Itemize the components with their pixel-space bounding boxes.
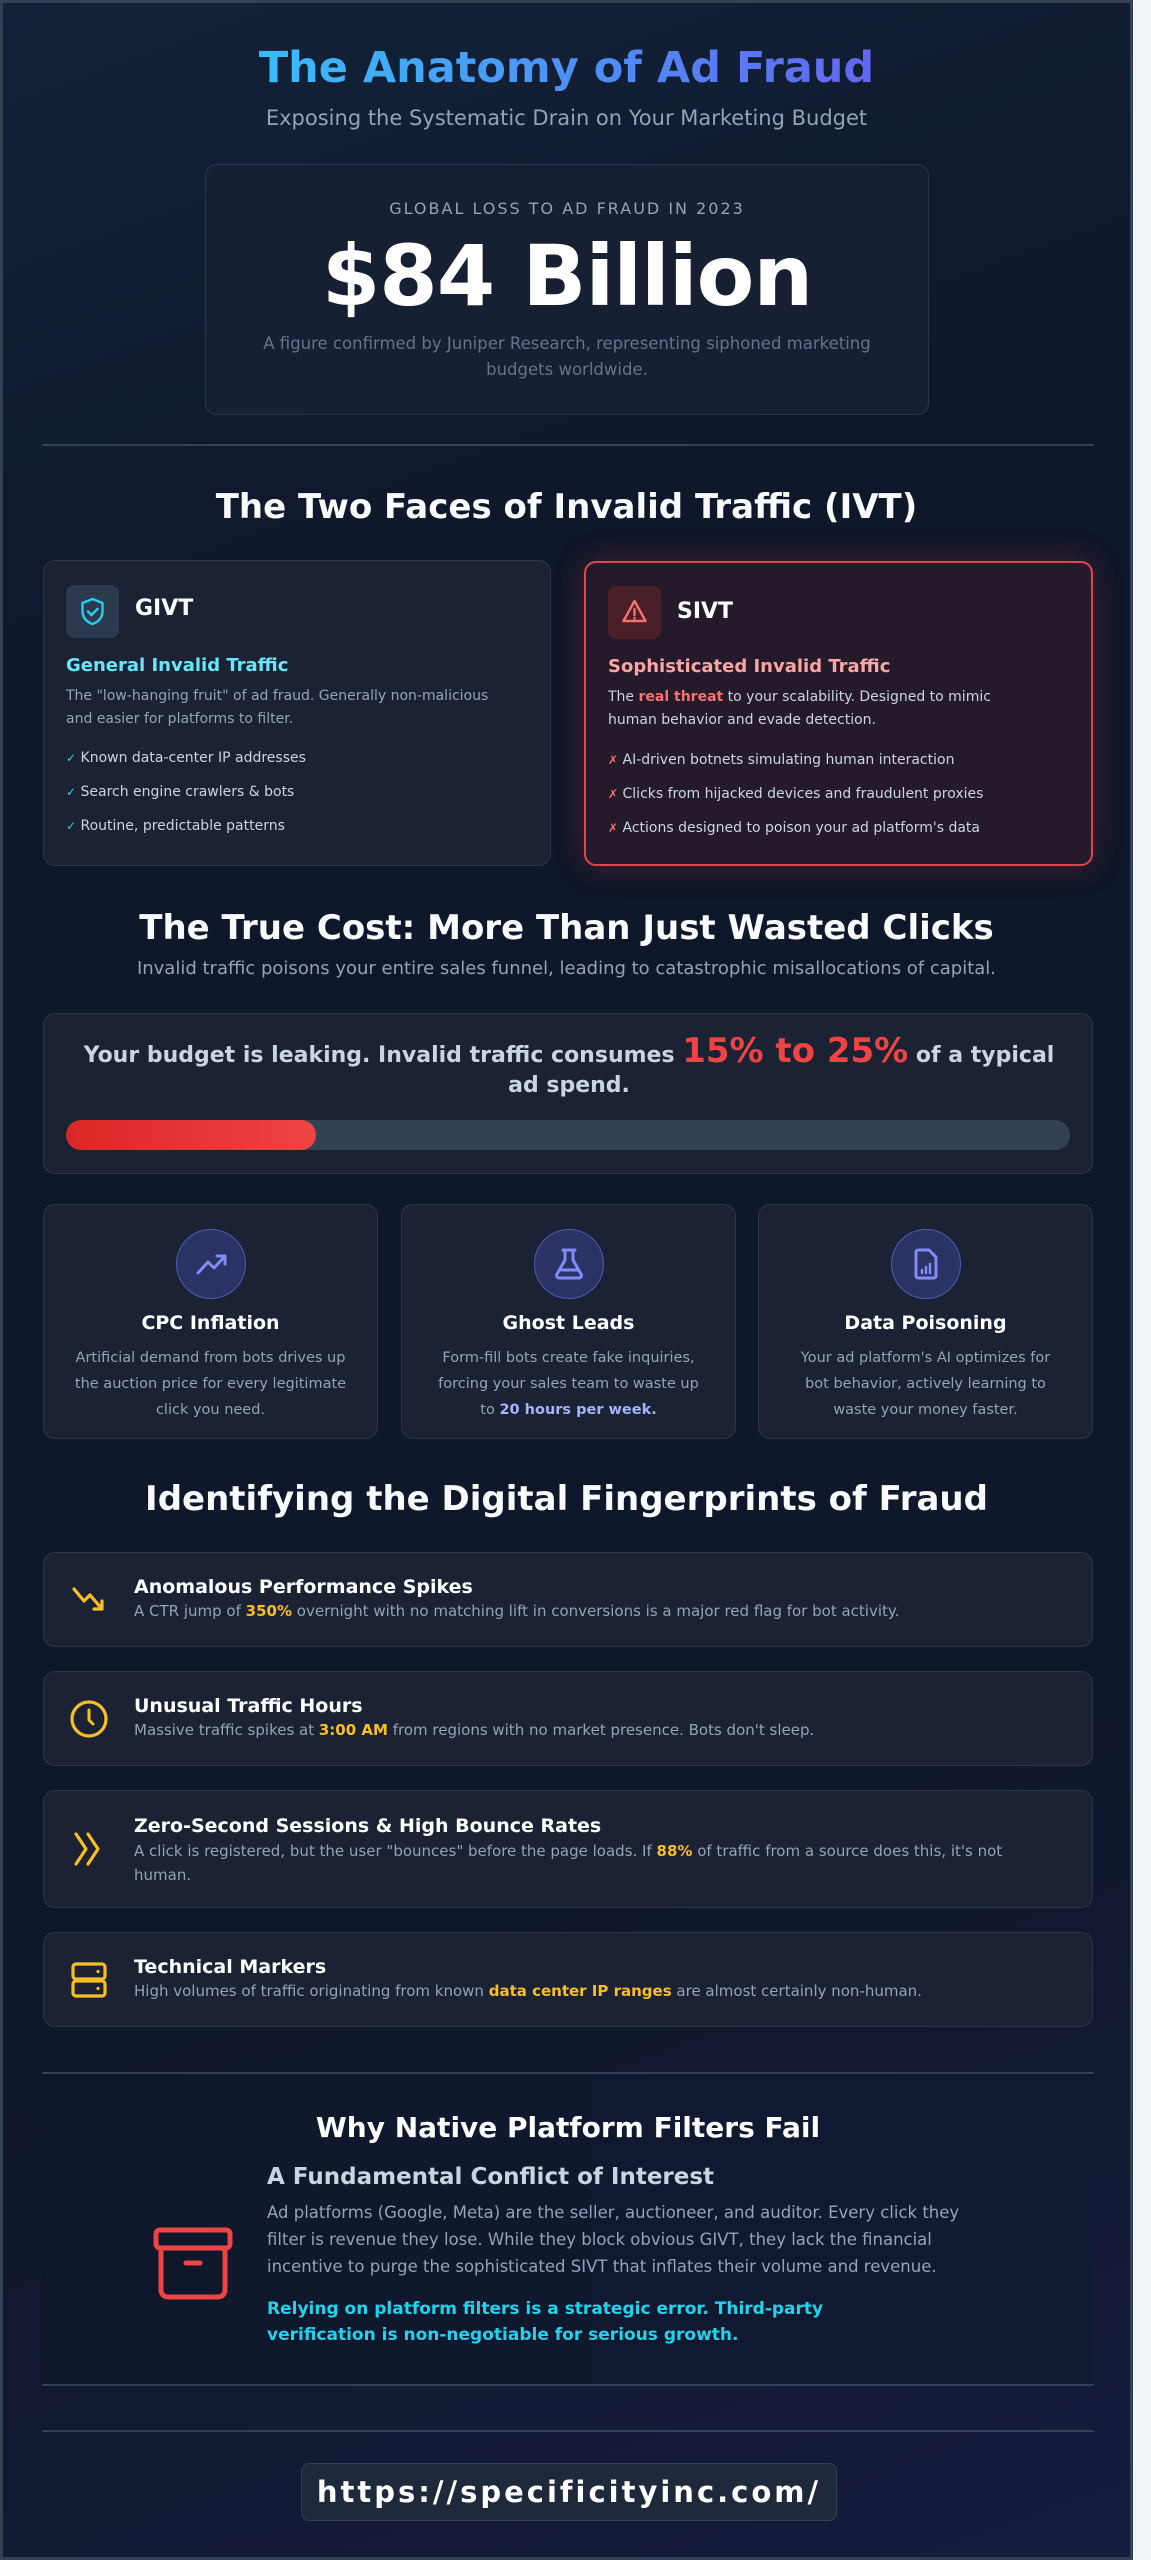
icon: chevrons [74,1832,100,1866]
text: Anomalous Performance Spikes [134,1576,473,1598]
list [608,752,983,836]
description: The "low-hanging fruit" of ad fraud. Generally non-malicious and easier for platforms to filter. [66,688,488,727]
text [134,1695,814,1739]
icon: trend [176,1229,246,1299]
desc: Your ad platform's AI optimizes for bot behavior, actively learning to waste your money faster. [801,1350,1050,1418]
heading: fingerprints: Identifying the Digital Fingerprints of Fraud [145,1479,988,1519]
icon: flask [534,1229,604,1299]
panel: GIVT [43,560,551,866]
text: Zero-Second Sessions & High Bounce Rates [134,1815,601,1837]
leak text: Your budget is leaking. Invalid traffic consumes 15% to 25% of a typical ad spend. [84,1031,1054,1098]
label GIVT: GIVT [135,596,193,621]
card: CPC inflation [43,1204,378,1439]
icon: server [71,1962,107,1998]
subheading: Invalid traffic poisons your entire sales funnel, leading to catastrophic misallocations of capital. [137,958,996,979]
stat label: GLOBAL LOSS TO AD FRAUD IN 2023 [389,199,745,218]
heading: true cost: The True Cost: More Than Just Wasted Clicks [139,908,994,948]
desc: Form-fill bots create fake inquiries, forcing your sales team to waste up to 20 hours per week. [438,1350,699,1418]
subtitle: Exposing the Systematic Drain on Your Marketing Budget [266,106,867,130]
icon: document chart [891,1229,961,1299]
text: Massive traffic spikes at 3:00 AM from regions with no market presence. Bots don't sleep. [134,1721,814,1739]
icon: clock [70,1700,108,1738]
text: Technical Markers [134,1956,326,1978]
row: zero-second sessions [43,1790,1093,1908]
panel: SIVT [584,561,1093,866]
label SIVT: SIVT [677,599,733,624]
icon: warning [608,586,661,639]
big number: $84 Billion [322,227,812,325]
panel: budget leak [43,1013,1093,1174]
heading: Why Native Platform Filters Fail [316,2111,820,2144]
row: traffic hours [43,1671,1093,1766]
text: Unusual Traffic Hours [134,1695,363,1717]
text [134,1576,899,1620]
progress bar [66,1120,1070,1150]
title: CPC Inflation [141,1312,280,1334]
desc: Artificial demand from bots drives up the auction price for every legitimate click you need. [75,1350,346,1418]
card: ghost leads [401,1204,736,1439]
list: ✓ Search engine crawlers & bots [66,784,294,800]
source note: A figure confirmed by Juniper Research, representing siphoned marketing budgets worldwide. [263,334,871,379]
title: Ghost Leads [503,1312,634,1334]
callout: Relying on platform filters is a strategic error. Third-party verification is non-negotiable for serious growth. [267,2299,823,2345]
list: ✗ Actions designed to poison your ad platform's data [608,820,980,836]
card: data poisoning [758,1204,1093,1439]
hero stat card [205,164,929,415]
list [66,750,306,834]
text: A click is registered, but the user "bounces" before the page loads. If 88% of traffic from a source does this, it's not human. [134,1842,1002,1884]
heading: two faces: The Two Faces of Invalid Traffic (IVT) [216,487,917,527]
icon: archive [154,2228,232,2300]
list: ✓ Known data-center IP addresses [66,750,306,766]
paragraph: Ad platforms (Google, Meta) are the seller, auctioneer, and auditor. Every click they filter is revenue they lose. While they block obvious GIVT, they lack the financial incentive to purge the sophisticated SIVT that inflates their volume and revenue. [267,2203,959,2276]
title: The Anatomy of Ad Fraud [259,43,874,93]
text: A CTR jump of 350% overnight with no matching lift in conversions is a major red flag for bot activity. [134,1602,899,1620]
description: The real threat to your scalability. Designed to mimic human behavior and evade detection. [608,689,991,728]
list: ✗ Clicks from hijacked devices and fraudulent proxies [608,786,983,802]
footer url: https://specificityinc.com/ [317,2475,821,2509]
text [134,1956,922,2000]
subtitle: General Invalid Traffic [66,655,288,676]
icon: shield [66,585,119,638]
row: technical markers [43,1932,1093,2027]
subtitle: Sophisticated Invalid Traffic [608,656,890,677]
subheading: A Fundamental Conflict of Interest [267,2164,714,2190]
text: High volumes of traffic originating from known data center IP ranges are almost certainly non-human. [134,1982,922,2000]
row: spikes [43,1552,1093,1647]
footer url [301,2463,837,2521]
list: ✗ AI-driven botnets simulating human interaction [608,752,954,768]
text [134,1815,1002,1884]
icon: trend down [72,1587,104,1611]
title: Data Poisoning [844,1312,1007,1334]
list: ✓ Routine, predictable patterns [66,818,285,834]
panel: why filters fail [42,2072,1094,2386]
